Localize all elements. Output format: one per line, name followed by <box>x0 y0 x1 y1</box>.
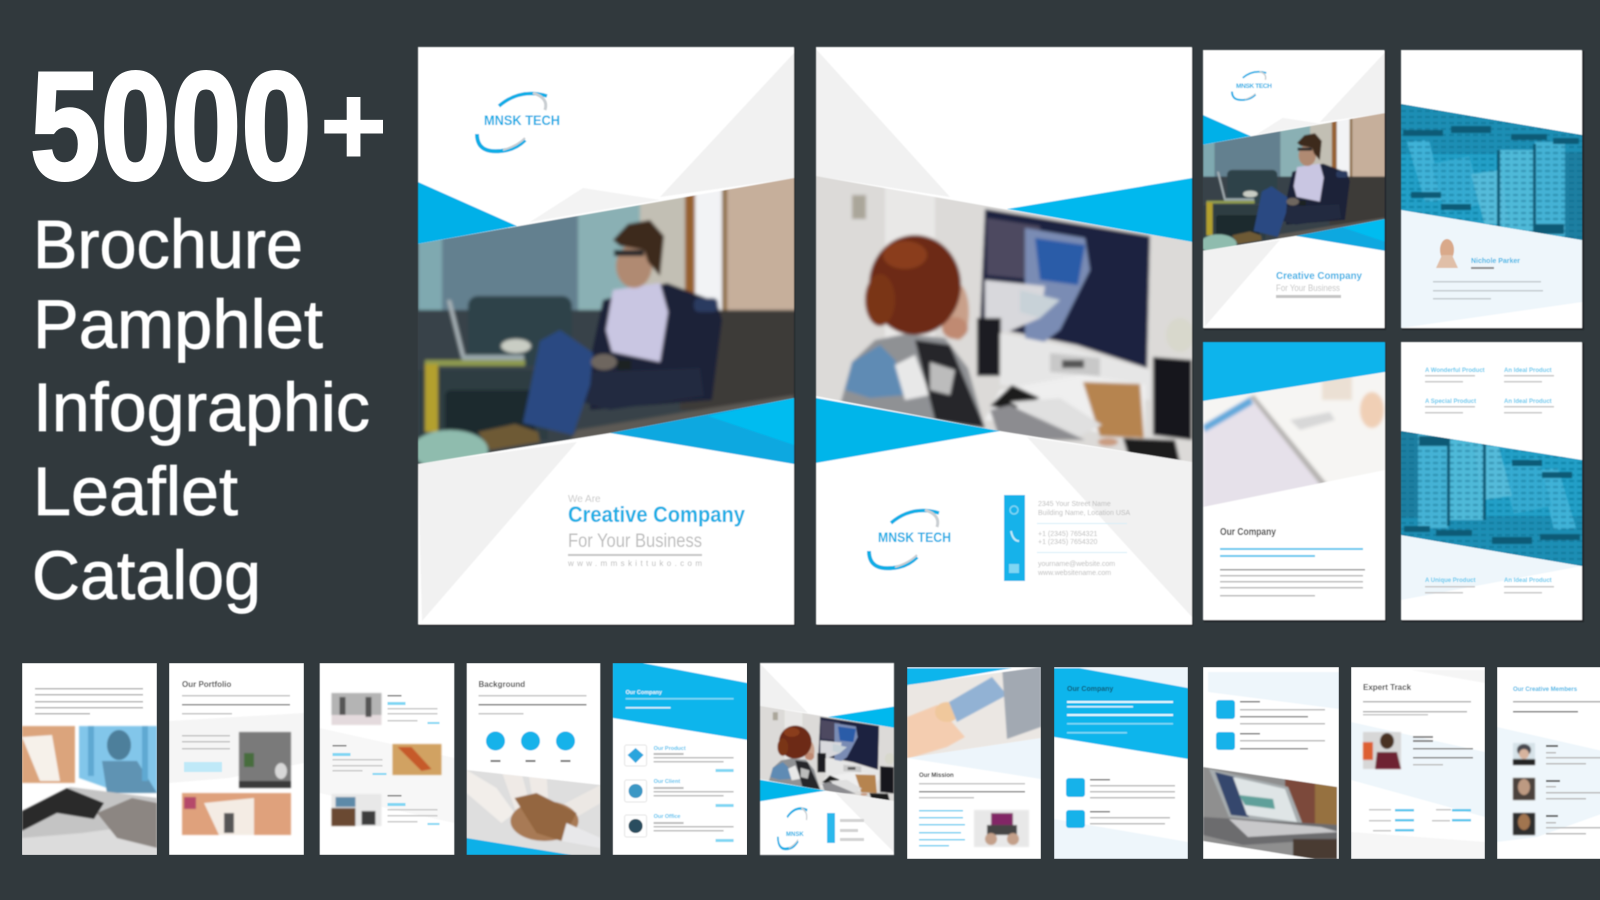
thumbnail 2: our portfolio page: Our Portfolio <box>182 680 231 689</box>
profile: Nichole Parker <box>1471 258 1520 265</box>
mini logo: MNSK <box>786 832 804 838</box>
thumbnail 6: back cover miniature <box>758 663 897 855</box>
contact icon bar <box>1004 495 1025 581</box>
logo: MNSK TECH: MNSK TECH <box>878 530 951 545</box>
contact details: yourname@website.com <box>1038 561 1115 568</box>
contact details: 2345 Your Street Name <box>1038 501 1111 508</box>
thumbnail 8: our company blue header page <box>1054 667 1188 859</box>
panel: small cover page: MNSK TECH <box>1236 83 1272 90</box>
tablet photo <box>1203 372 1385 512</box>
mini contact bar <box>827 813 835 843</box>
cover tagline: Creative Company <box>568 502 746 527</box>
product type list <box>32 206 370 614</box>
thumbnail 7: our mission page <box>907 667 1041 859</box>
product type list: Pamphlet <box>33 286 323 363</box>
thumbnail 2: our portfolio page <box>169 663 304 855</box>
thumbnail 7: our mission page: Our Mission <box>919 773 954 779</box>
cover tagline <box>567 494 746 568</box>
panel: small cover page <box>1199 50 1392 330</box>
thumbnail 10: expert team page: Expert Track <box>1363 683 1412 692</box>
thumbnail 1: intro page with photos <box>22 663 157 855</box>
product type list: Leaflet <box>33 453 238 530</box>
contact details: www.websitename.com <box>1037 570 1111 577</box>
product labels: An Ideal Product <box>1504 368 1552 374</box>
thumbnail 4: background page with team hands: Background <box>478 680 525 689</box>
panel: product list page <box>1394 342 1584 622</box>
thumbnail 10: expert team page <box>1351 667 1485 859</box>
product type list: Brochure <box>33 206 303 283</box>
contact details: +1 (2345) 7654321 <box>1038 531 1097 538</box>
title: 5000+: + <box>320 62 387 190</box>
city photo band <box>1399 102 1589 247</box>
panel: brochure front cover <box>410 47 810 626</box>
cover tagline: For Your Business <box>568 531 702 552</box>
contact details: Building Name, Location USA <box>1038 510 1131 517</box>
panel: small cover page: Creative Company <box>1276 270 1362 282</box>
thumbnail 9: features with laptop page <box>1203 667 1339 859</box>
thumbnail 5: services with blue header: Our Office <box>654 814 681 820</box>
panel: city profile page <box>1399 50 1589 330</box>
product type list: Infographic <box>33 369 370 446</box>
mini logo <box>778 808 807 849</box>
city photo band <box>1394 423 1584 568</box>
cover tagline: We Are <box>568 494 601 505</box>
contact details: +1 (2345) 7654320 <box>1038 539 1097 546</box>
thumbnail 5: services with blue header: Our Company <box>626 690 663 696</box>
panel: our company page <box>1203 342 1386 622</box>
thumbnail 11: creative members page <box>1497 667 1600 859</box>
logo: MNSK TECH <box>477 93 560 151</box>
panel: small cover page: For Your Business <box>1276 283 1340 293</box>
panel: brochure back cover <box>810 47 1200 626</box>
thumbnail 5: services with blue header <box>612 663 747 855</box>
thumbnail 3: services with photos page <box>320 663 454 855</box>
company text: Our Company <box>1220 526 1276 538</box>
product type list: Catalog <box>32 537 261 614</box>
title: 5000+: 5000 <box>30 39 312 212</box>
product labels: A Special Product <box>1425 399 1476 405</box>
product labels: A Wonderful Product <box>1425 368 1485 374</box>
thumbnail 11: creative members page: Our Creative Members <box>1513 687 1578 693</box>
product labels <box>1425 368 1554 594</box>
profile <box>1433 239 1543 300</box>
thumbnail 5: services with blue header: Our Client <box>654 779 680 785</box>
contact details <box>1037 501 1131 577</box>
product labels: A Unique Product <box>1425 578 1475 584</box>
thumbnail 5: services with blue header: Our Product <box>654 746 686 752</box>
cover tagline: www.mmskittuko.com <box>567 559 702 568</box>
thumbnail 4: background page with team hands <box>466 663 600 855</box>
product labels: An Ideal Product <box>1504 399 1552 405</box>
thumbnail 8: our company blue header page: Our Company <box>1067 686 1113 693</box>
product labels: An Ideal Product <box>1504 578 1552 584</box>
logo: MNSK TECH <box>869 510 951 568</box>
logo: MNSK TECH: MNSK TECH <box>484 113 560 128</box>
